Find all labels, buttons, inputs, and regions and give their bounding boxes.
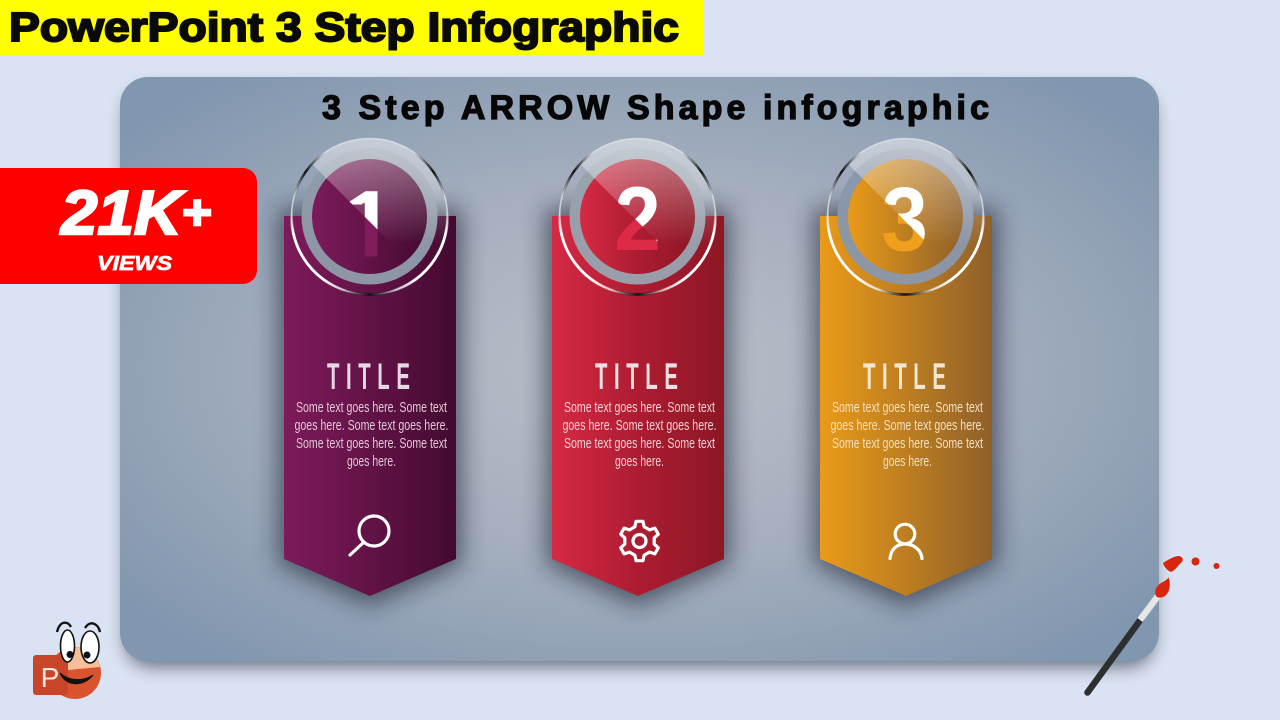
text 3: goes here. <box>883 453 932 470</box>
badge: views <box>0 168 257 284</box>
badge 2: 2 <box>614 168 661 270</box>
panel: step 2 <box>546 138 730 606</box>
text 2: goes here. <box>615 453 664 470</box>
text 1: Some text goes here. Some text <box>296 399 448 416</box>
text 1: goes here. <box>347 453 396 470</box>
text 2 <box>562 399 716 470</box>
panel: step 1 <box>278 138 462 606</box>
text 1: goes here. Some text goes here. <box>294 417 448 434</box>
text 1: Some text goes here. Some text <box>296 435 448 452</box>
ribbon 3 <box>820 216 992 596</box>
icon: gear <box>621 521 658 561</box>
text 3: Some text goes here. Some text <box>832 435 984 452</box>
badge: views: 21K <box>61 179 175 248</box>
icon: paint brush <box>1088 556 1220 692</box>
badge 3: 3 <box>881 168 928 270</box>
banner title: PowerPoint 3 Step Infographic <box>9 4 679 50</box>
badge 1 <box>292 138 448 295</box>
heading: 3 Step ARROW Shape infographic <box>322 89 989 127</box>
text 2: Some text goes here. Some text <box>564 399 716 416</box>
badge: views: VIEWS <box>97 253 173 275</box>
text 3 <box>830 399 984 470</box>
icon: PowerPoint mascot: P <box>41 662 59 693</box>
badge 1: 1 <box>343 172 395 278</box>
badge 3 <box>828 138 984 295</box>
text 3: goes here. Some text goes here. <box>830 417 984 434</box>
text 3: Some text goes here. Some text <box>832 399 984 416</box>
badge 1: 1 <box>343 172 395 278</box>
badge 2: 2 <box>614 168 661 270</box>
icon: person <box>890 524 922 558</box>
badge 3: 3 <box>881 168 928 270</box>
text 2: goes here. Some text goes here. <box>562 417 716 434</box>
text 2: Some text goes here. Some text <box>564 435 716 452</box>
badge: views: + <box>181 187 211 240</box>
icon: magnifier <box>350 516 389 555</box>
ribbon 2 <box>552 216 724 596</box>
title 2: TITLE <box>595 357 684 398</box>
badge 2 <box>560 138 716 295</box>
ribbon 1 <box>284 216 456 596</box>
icon: PowerPoint mascot <box>33 623 101 699</box>
panel: main card <box>120 77 1159 668</box>
title 1: TITLE <box>327 357 416 398</box>
panel: step 3 <box>814 138 998 606</box>
text 1 <box>294 399 448 470</box>
title 3: TITLE <box>863 357 952 398</box>
